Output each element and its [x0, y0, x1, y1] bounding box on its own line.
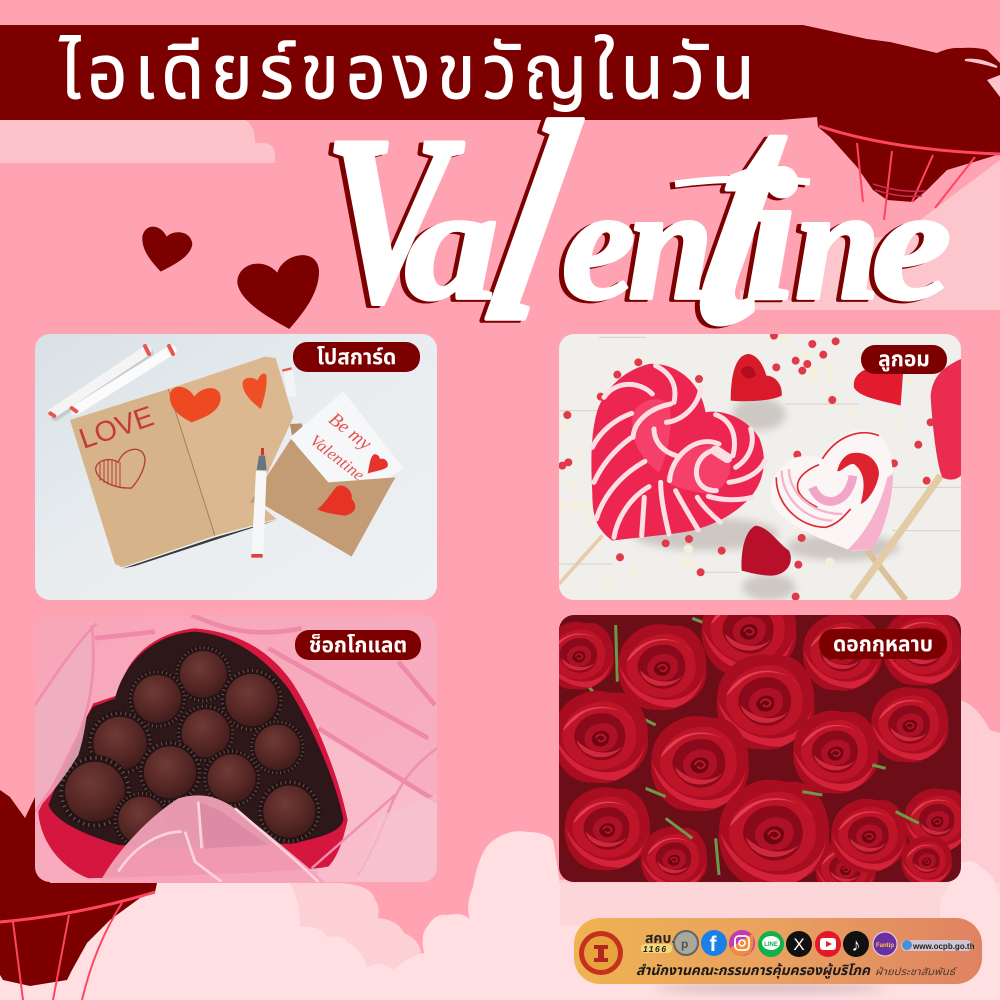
- label: candy: ลูกอม: [878, 348, 930, 372]
- label: roses: [819, 629, 947, 659]
- notebook: [70, 357, 293, 569]
- hotline 1166: สคบ.: [645, 930, 675, 946]
- hotline 1166: 1166: [643, 944, 668, 954]
- photo: chocolate: [35, 615, 437, 882]
- label: roses: ดอกกุหลาบ: [833, 633, 933, 657]
- Valentine shadow: i: [740, 134, 792, 341]
- title banner: [0, 25, 1000, 155]
- Valentine: e: [872, 154, 951, 333]
- label: postcard: โปสการ์ด: [317, 346, 396, 369]
- icon: markers: [50, 346, 297, 416]
- Valentine shadow: e: [557, 158, 630, 336]
- website: [901, 940, 975, 951]
- Valentine shadow: n: [623, 157, 708, 336]
- icon: x: X: [793, 935, 805, 954]
- footer bar: [574, 918, 982, 984]
- sheer ribbon: [35, 623, 437, 882]
- Valentine shadow: l: [463, 67, 591, 383]
- label: chocolate: ช็อกโกแลต: [309, 634, 407, 657]
- Valentine shadow: n: [790, 157, 875, 336]
- icon: small heart: [142, 227, 192, 272]
- notebook: LOVE: [75, 400, 158, 456]
- agency name: สำนักงานคณะกรรมการคุ้มครองผู้บริโภค: [636, 962, 871, 979]
- chocolate box: [38, 628, 348, 878]
- department: ฝ่ายประชาสัมพันธ์: [875, 966, 957, 978]
- icon: ocpb: [674, 931, 698, 955]
- icon: line: [758, 931, 784, 957]
- hot air balloon: bottom left: [0, 790, 157, 1000]
- hot air balloon: top right: [818, 60, 1000, 220]
- icon: ocpb: p: [681, 937, 688, 951]
- jelly hearts: [731, 354, 961, 576]
- footer shadow: [655, 983, 885, 993]
- photo: candy: [559, 334, 961, 601]
- icon: facebook: f: [710, 933, 718, 956]
- Valentine: l: [468, 65, 596, 381]
- envelope and card: [250, 391, 403, 557]
- lollipop: red heart: [591, 364, 765, 541]
- icon: line: LINE: [764, 942, 778, 948]
- icon: fantip: Fantip: [876, 943, 894, 949]
- icon: x: [786, 931, 812, 957]
- icon: tiktok: ♪: [852, 935, 860, 955]
- label: chocolate: [295, 630, 421, 660]
- Valentine: [324, 32, 951, 390]
- hotline 1166: [641, 930, 675, 954]
- envelope and card: Be my: [325, 409, 375, 455]
- Valentine shadow: a: [400, 156, 494, 335]
- photo: roses: [559, 615, 961, 882]
- icon: instagram: [729, 930, 755, 956]
- envelope and card: Valentine: [307, 431, 369, 485]
- Valentine: t: [674, 32, 825, 390]
- label: postcard: [293, 342, 420, 372]
- Valentine: V: [324, 86, 464, 352]
- sprinkles: [562, 336, 931, 597]
- Valentine: e: [562, 156, 635, 334]
- Valentine: a: [405, 154, 499, 333]
- Valentine shadow: e: [867, 156, 946, 335]
- shadows: [632, 397, 899, 601]
- icon: large heart: [237, 255, 319, 329]
- stems and leaves: [588, 616, 702, 726]
- photo: postcard: [35, 334, 437, 600]
- icon: fantip: [873, 932, 897, 956]
- Valentine: i: [745, 132, 797, 339]
- icon: tiktok: [843, 931, 869, 957]
- Valentine: n: [795, 155, 880, 334]
- label: candy: [861, 345, 947, 374]
- Valentine: n: [628, 155, 713, 334]
- Valentine shadow: t: [669, 34, 820, 392]
- lollipop: white heart: [770, 430, 893, 551]
- icon: youtube: [815, 931, 841, 957]
- background ribbons: [95, 615, 437, 802]
- icon: pen: [251, 448, 267, 558]
- sticks: [559, 536, 602, 584]
- title text: ไอเดียร์ของขวัญในวัน: [59, 30, 755, 115]
- icon: seal: [579, 931, 623, 975]
- Valentine shadow: [319, 34, 946, 392]
- icon: facebook: [701, 930, 727, 956]
- Valentine shadow: V: [319, 88, 459, 354]
- website: www.ocpb.go.th: [912, 942, 975, 951]
